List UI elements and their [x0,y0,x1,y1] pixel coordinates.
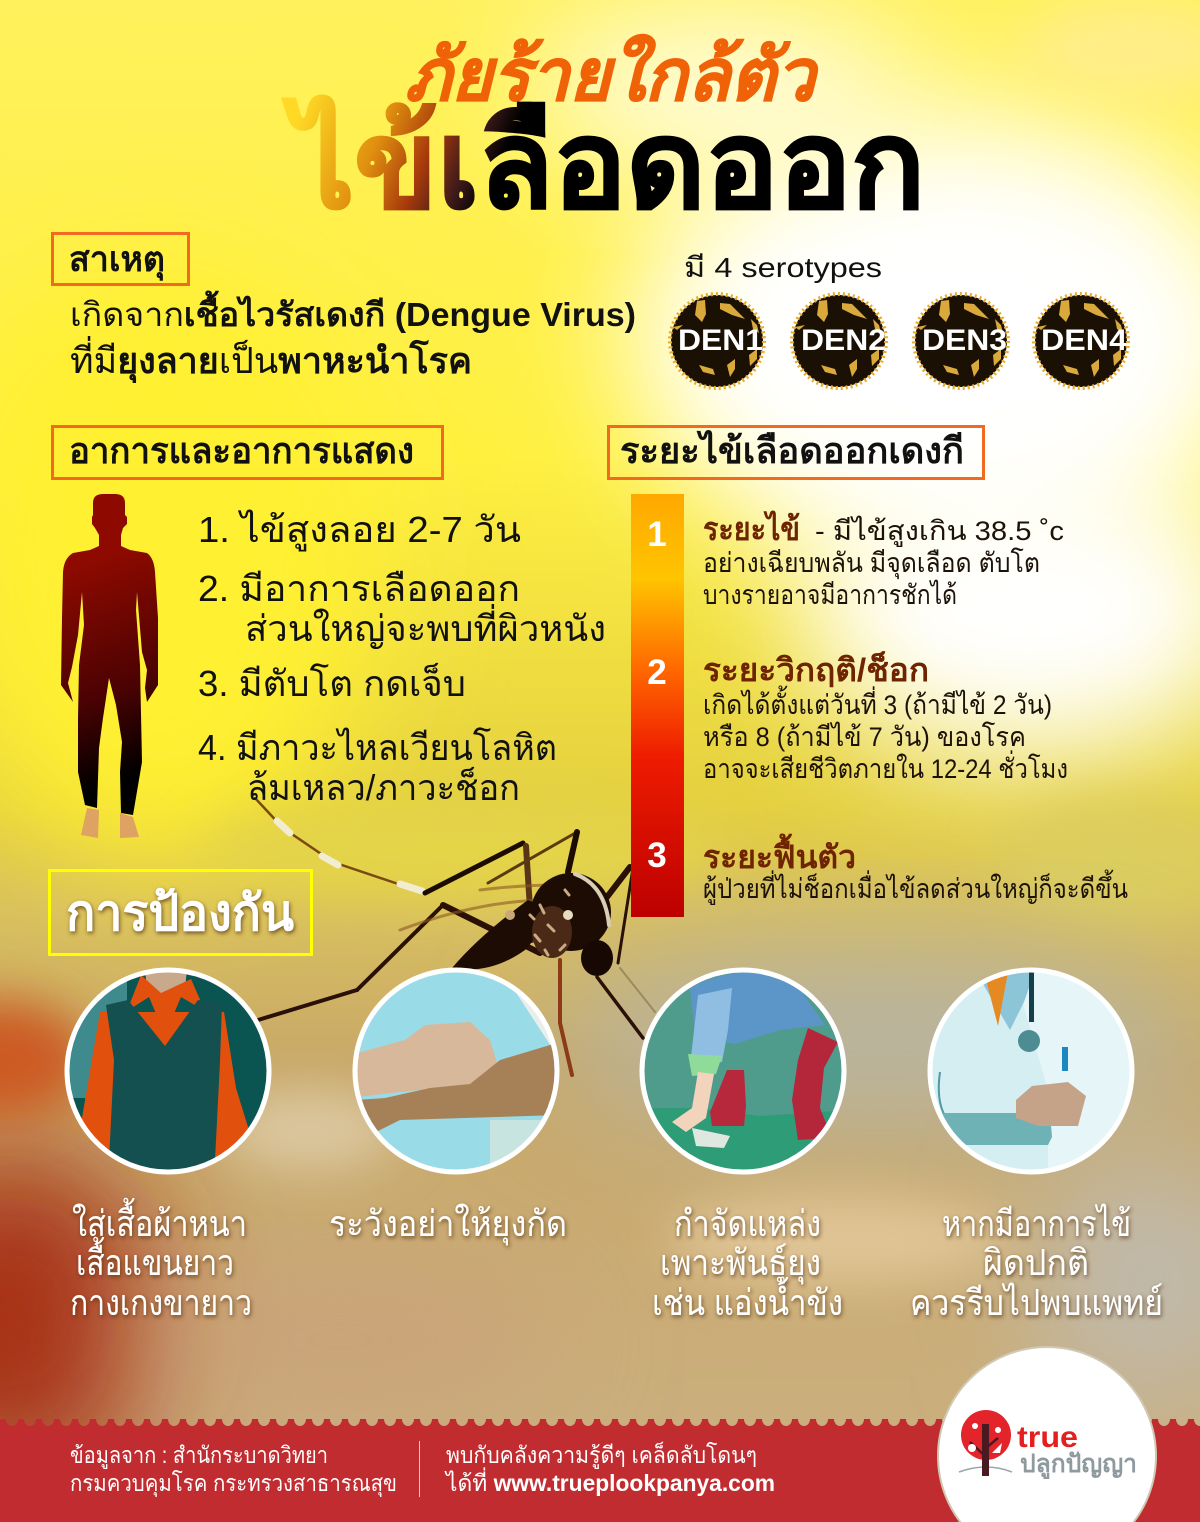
symptoms list: ล้มเหลว/ภาวะช็อก [247,765,520,808]
caption: breeding sites: เพาะพันธุ์ยุง [660,1242,821,1285]
virus: DEN1: DEN1 [678,324,763,357]
phase 1: - มีไข้สูงเกิน 38.5 ˚c [815,516,1064,547]
footer band: พบกับคลังความรู้ดีๆ เคล็ดลับโดนๆ [446,1440,757,1469]
caption: see a doctor: ควรรีบไปพบแพทย์ [910,1282,1163,1323]
virus: DEN1 [670,294,764,388]
phase 2: อาจจะเสียชีวิตภายใน 12-24 ชั่วโมง [703,750,1068,784]
caption: clothing: กางเกงขายาว [70,1282,252,1323]
symptoms list [198,509,606,808]
caption: see a doctor [910,1203,1163,1323]
heading: phases: ระยะไข้เลือดออกเดงกี [620,429,964,471]
caption: clothing: เสื้อแขนยาว [76,1236,234,1283]
heading: prevention: การป้องกัน [66,885,294,941]
caption: see a doctor: หากมีอาการไข้ [942,1203,1131,1244]
symptoms list: 2. มีอาการเลือดออก [198,568,520,609]
caption: breeding sites: เช่น แอ่งน้ำขัง [652,1276,843,1323]
photo: doctor [928,968,1140,1180]
symptoms list: ส่วนใหญ่จะพบที่ผิวหนัง [245,604,606,649]
severity bar [631,494,684,917]
cause text: ที่มียุงลายเป็นพาหะนำโรค [70,336,472,384]
phase 2 [703,650,1068,784]
photo: child with puddle [640,968,850,1180]
phase 2: หรือ 8 (ถ้ามีไข้ 7 วัน) ของโรค [703,722,1026,752]
severity bar: 2 [647,653,667,692]
phase 2: ระยะวิกฤติ/ช็อก [703,650,929,688]
caption: clothing [70,1197,252,1323]
heading: cause: สาเหตุ [69,240,165,281]
cause text [70,290,636,384]
virus: DEN2 [792,294,886,388]
photo: scratching arm [350,968,560,1180]
mosquito [255,798,655,1075]
icon: human silhouette [61,494,158,838]
phase 3: ระยะฟื้นตัว [703,833,856,875]
cause text: เกิดจากเชื้อไวรัสเดงกี (Dengue Virus) [70,290,636,333]
icon: knowledge tree [959,1410,1012,1476]
logo badge: true [1017,1421,1078,1454]
phase 2: เกิดได้ตั้งแต่วันที่ 3 (ถ้ามีไข้ 2 วัน) [703,685,1052,720]
virus: DEN3: DEN3 [922,324,1007,357]
title main: ไข้เลือดออก [282,96,925,233]
logo badge: ปลูกปัญญา [1020,1450,1137,1480]
photo: warm clothes [65,968,271,1180]
severity bar: 1 [647,515,667,554]
caption: breeding sites: กำจัดแหล่ง [674,1203,821,1244]
caption: breeding sites [652,1203,843,1323]
logo badge [938,1347,1156,1522]
phase 1: ระยะไข้ [703,510,800,547]
symptoms list: 3. มีตับโต กดเจ็บ [198,661,466,704]
phase 1: อย่างเฉียบพลัน มีจุดเลือด ตับโต [703,548,1040,580]
footer band [0,1419,1200,1522]
heading: prevention [50,870,312,954]
virus: DEN3 [914,294,1008,388]
phase 3 [703,833,1128,905]
footer band: กรมควบคุมโรค กระทรวงสาธารณสุข [70,1470,397,1497]
footer band: ได้ที่ www.trueplookpanya.com [444,1467,775,1496]
symptoms list: 4. มีภาวะไหลเวียนโลหิต [198,727,557,768]
heading: symptoms: อาการและอาการแสดง [69,430,414,471]
virus: DEN4: DEN4 [1041,324,1127,357]
serotypes label: มี 4 serotypes [684,252,882,283]
footer band: ข้อมูลจาก : สำนักระบาดวิทยา [70,1442,328,1469]
virus: DEN4 [1034,294,1128,388]
heading: cause [52,234,188,284]
title script: ภัยร้ายใกล้ตัว [405,34,819,116]
virus: DEN2: DEN2 [801,324,886,357]
caption: see a doctor: ผิดปกติ [983,1242,1089,1283]
phase 3: ผู้ป่วยที่ไม่ช็อกเมื่อไข้ลดส่วนใหญ่ก็จะดีขึ้น [703,869,1128,905]
caption: clothing: ใส่เสื้อผ้าหนา [72,1197,247,1244]
phase 1: บางรายอาจมีอาการชักได้ [703,580,957,610]
severity bar: 3 [647,836,667,875]
symptoms list: 1. ไข้สูงลอย 2-7 วัน [198,509,521,552]
caption: avoid bites: ระวังอย่าให้ยุงกัด [329,1203,567,1246]
phase 1 [703,510,1064,610]
